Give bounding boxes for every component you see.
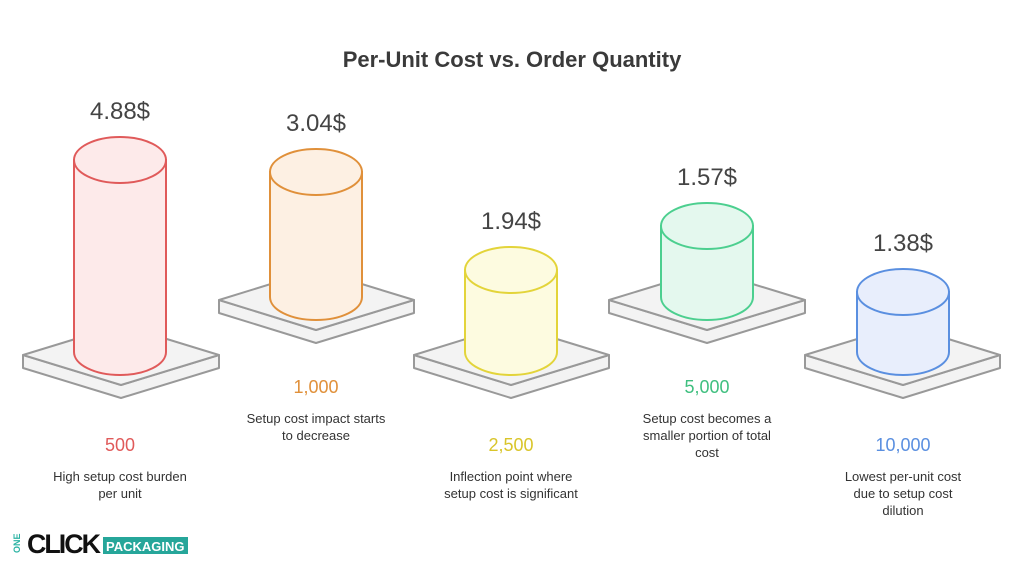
desc 2: to decrease: [282, 428, 350, 443]
quantity 1: 500: [105, 435, 135, 455]
cylinder 5: [857, 269, 949, 375]
logo: CLICK: [27, 529, 101, 559]
plate 1: [23, 325, 219, 398]
value 5: 1.38$: [873, 230, 933, 257]
desc 3: setup cost is significant: [444, 486, 578, 501]
desc 4: Setup cost becomes a: [643, 411, 772, 426]
logo: PACKAGING: [106, 539, 184, 554]
logo: [12, 529, 188, 559]
desc 3: Inflection point where: [450, 469, 572, 484]
quantity 5: 10,000: [875, 435, 931, 455]
cylinder 4: [661, 203, 753, 320]
plate 3: [414, 325, 609, 398]
quantity 3: 2,500: [488, 435, 534, 455]
column: 500: [23, 98, 219, 501]
desc 1: High setup cost burden: [53, 469, 187, 484]
plate 2: [219, 270, 414, 343]
plate 5: [805, 325, 1000, 398]
plate 4: [609, 270, 805, 343]
desc 5: due to setup cost: [853, 486, 953, 501]
column: 2,500: [414, 208, 609, 501]
column: 10,000: [805, 230, 1000, 518]
cylinder 1: [74, 137, 166, 375]
quantity 4: 5,000: [684, 377, 730, 397]
value 2: 3.04$: [286, 110, 346, 137]
quantity 2: 1,000: [293, 377, 339, 397]
desc 4: cost: [695, 445, 719, 460]
value 1: 4.88$: [90, 98, 150, 125]
value 4: 1.57$: [677, 164, 737, 191]
logo: ONE: [12, 533, 22, 553]
desc 2: Setup cost impact starts: [247, 411, 386, 426]
title: Per-Unit Cost vs. Order Quantity: [343, 47, 682, 72]
column: 1,000: [219, 110, 414, 443]
cylinder 2: [270, 149, 362, 320]
desc 4: smaller portion of total: [643, 428, 771, 443]
cylinder 3: [465, 247, 557, 375]
column: 5,000: [609, 164, 805, 460]
desc 1: per unit: [98, 486, 142, 501]
value 3: 1.94$: [481, 208, 541, 235]
desc 5: dilution: [882, 503, 924, 518]
desc 5: Lowest per-unit cost: [845, 469, 962, 484]
